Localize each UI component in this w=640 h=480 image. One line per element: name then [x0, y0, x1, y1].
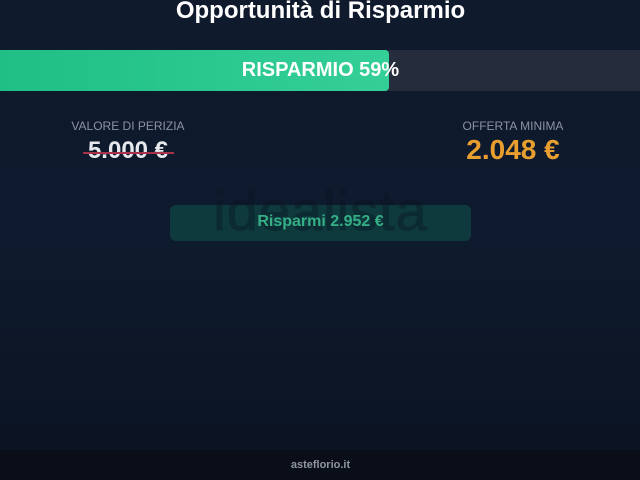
footer: [0, 450, 640, 480]
value: 2.048 euro: 2.048 €: [466, 134, 560, 165]
strikethrough: [83, 152, 174, 154]
value: 5.000 euro: 5.000 €: [88, 137, 168, 164]
savings text: Risparmi 2.952 €: [257, 213, 384, 230]
progress label: RISPARMIO 59%: [242, 59, 399, 81]
progress bar: [0, 50, 640, 91]
savings badge: [170, 205, 471, 241]
label: valore di perizia: VALORE DI PERIZIA: [71, 119, 185, 133]
footer text: asteflorio.it: [291, 459, 350, 471]
watermark: idealista: [213, 179, 428, 242]
panel: offerta minima: [463, 119, 564, 165]
label: offerta minima: OFFERTA MINIMA: [463, 119, 563, 133]
panel: valore di perizia: [71, 119, 185, 164]
progress fill: [0, 50, 389, 91]
